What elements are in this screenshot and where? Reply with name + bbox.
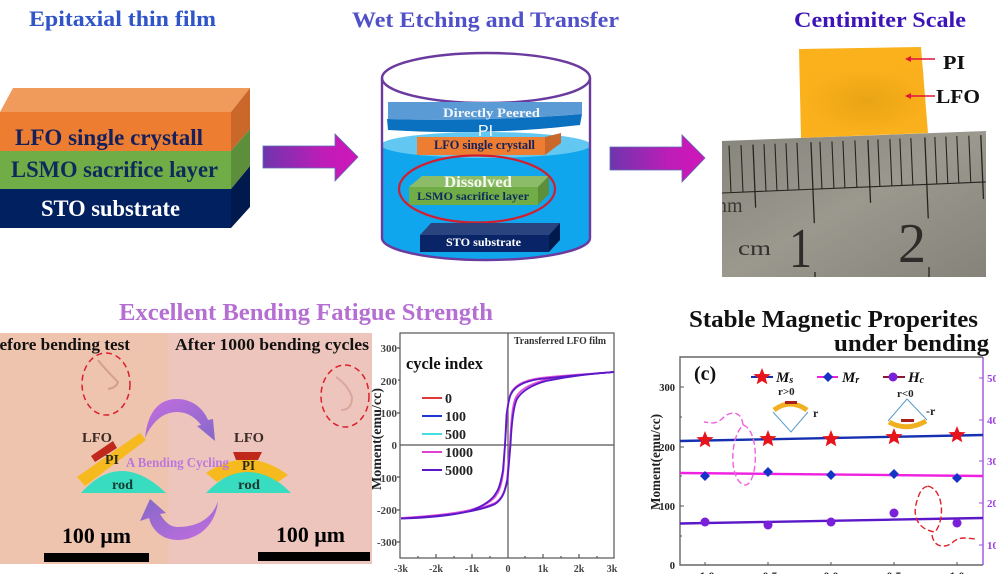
ruler photo	[717, 130, 987, 280]
legend: Ms, Mr, Hc: r	[855, 375, 859, 386]
diagram: bent film on rod	[206, 431, 291, 493]
legend: Ms, Mr, Hc	[751, 368, 925, 386]
legend: cycle index: 1000	[445, 446, 473, 461]
legend: cycle index: 500	[445, 428, 466, 443]
diagram: bent film on rod: rod	[238, 478, 260, 493]
left axis labels	[659, 383, 675, 572]
STO substrate block	[420, 223, 560, 252]
x axis labels	[696, 569, 964, 574]
micrograph: before bending: 100 µm	[62, 523, 131, 548]
micrograph: before bending	[0, 333, 168, 564]
micrograph: after bending	[168, 333, 372, 564]
pink dashed callout	[704, 413, 755, 485]
arrow: film to etching	[263, 134, 358, 181]
LFO block: LFO single crystall	[434, 137, 535, 152]
legend: Ms, Mr, Hc: M	[776, 370, 789, 386]
callout: PI	[905, 52, 965, 74]
legend: cycle index: 5000	[445, 464, 473, 479]
label: a bending cycling: A Bending Cycling	[126, 456, 229, 471]
arrow: curved forward	[145, 399, 215, 441]
Mr markers	[700, 467, 962, 483]
x axis labels	[394, 564, 618, 574]
diagram: flat film on rod: rod	[112, 478, 133, 493]
panel tag (c): (c)	[694, 363, 716, 385]
diagram: bent film on rod: LFO	[234, 431, 264, 446]
heading: stable magnetic properites under bending	[689, 307, 989, 357]
layered film stack: LFO single crystall	[15, 125, 203, 150]
legend: cycle index	[406, 354, 483, 479]
heading: stable magnetic properites under bending: Stable Magnetic Properites	[689, 307, 978, 333]
heading: wet etching and transfer: Wet Etching and Transfer	[352, 7, 619, 32]
callout: LFO: LFO	[936, 86, 980, 108]
callout: PI: PI	[943, 52, 965, 74]
heading: epitaxial thin film: Epitaxial thin film	[29, 6, 216, 31]
LFO block	[417, 133, 561, 155]
y axis labels: -100	[377, 473, 397, 485]
layered film stack	[0, 88, 250, 228]
inset: negative bending radius	[888, 388, 936, 427]
Ms markers	[696, 426, 966, 447]
legend: Ms, Mr, Hc: M	[842, 370, 855, 386]
ruler photo: cm	[738, 238, 772, 260]
ruler photo: 1	[789, 218, 812, 280]
red dashed callout	[915, 486, 977, 546]
y axis title: Moment(emu/cc)	[370, 388, 385, 490]
legend: cycle index: cycle index	[406, 354, 483, 373]
panel: wet etching and transfer	[352, 7, 619, 260]
y axis labels: 0	[392, 440, 398, 452]
series lines	[680, 435, 983, 524]
diagram: flat film on rod: PI	[105, 453, 119, 468]
dissolved LSMO block: LSMO sacrifice layer	[417, 189, 530, 203]
heading: stable magnetic properites under bending: under bending	[834, 331, 989, 357]
diagram: flat film on rod	[77, 431, 166, 493]
y axis labels: 100	[380, 408, 398, 420]
panel: stable magnetic properties	[648, 307, 996, 574]
inset: positive bending radius: r>0	[778, 386, 795, 398]
y axis labels: 300	[380, 343, 398, 355]
magnetization curves	[401, 372, 614, 518]
panel: epitaxial thin film	[0, 6, 250, 228]
left axis labels: 0	[670, 561, 675, 572]
layered film stack: LSMO sacrifice layer	[11, 157, 218, 182]
plot frame and axes	[397, 333, 614, 558]
legend: Ms, Mr, Hc: c	[920, 375, 925, 386]
arrow: etching to centimeter scale	[610, 135, 705, 182]
y axis labels	[377, 343, 398, 549]
left axis labels: 100	[659, 502, 675, 513]
heading: centimiter scale: Centimiter Scale	[794, 7, 966, 32]
ruler photo: 2	[898, 213, 926, 275]
chart: hysteresis loops	[370, 333, 618, 574]
right axis labels	[987, 373, 996, 552]
callout: LFO	[905, 86, 980, 108]
inset: positive bending radius: r	[813, 406, 819, 420]
panel: bending micrographs	[0, 333, 372, 564]
inset: positive bending radius	[773, 386, 819, 432]
legend: Ms, Mr, Hc: H	[908, 370, 920, 386]
chart caption: Transferred LFO film	[514, 336, 607, 347]
PI layer, directly peered: Directly Peered	[443, 105, 541, 120]
diagram: bent film on rod: PI	[242, 459, 255, 474]
arrow: curved return	[140, 499, 218, 540]
micrograph: after bending: 100 µm	[276, 522, 345, 547]
y axis title: Moment(emu/cc)	[648, 414, 663, 510]
Hc markers	[700, 508, 962, 530]
legend: cycle index: 100	[445, 410, 466, 425]
y axis labels: -300	[377, 537, 397, 549]
inset: negative bending radius: -r	[926, 404, 936, 418]
beaker with etchant	[381, 53, 591, 260]
legend: cycle index: 0	[445, 392, 452, 407]
left axis labels: 300	[659, 383, 675, 394]
layered film stack: STO substrate	[41, 196, 180, 221]
orange PI film photo	[799, 47, 928, 138]
y axis labels: 200	[380, 376, 398, 388]
ruler photo: nm	[717, 195, 743, 217]
left axis labels: 200	[659, 443, 675, 454]
PI layer, directly peered	[387, 102, 582, 140]
heading: excellent bending fatigue strength: Excellent Bending Fatigue Strength	[119, 300, 493, 326]
y axis labels: -200	[377, 505, 397, 517]
STO substrate block: STO substrate	[446, 235, 522, 249]
panel: centimiter scale	[717, 7, 987, 280]
red highlight ellipse	[399, 156, 555, 222]
dissolved LSMO block	[409, 174, 549, 205]
diagram: flat film on rod: LFO	[82, 431, 112, 446]
dissolved LSMO block: Dissolved	[444, 174, 512, 191]
legend: Ms, Mr, Hc: s	[788, 375, 793, 386]
inset: negative bending radius: r<0	[897, 388, 914, 400]
plot frame and ticks	[680, 357, 983, 565]
micrograph: after bending: After 1000 bending cycles	[175, 335, 369, 354]
PI layer, directly peered: PI	[478, 123, 493, 140]
